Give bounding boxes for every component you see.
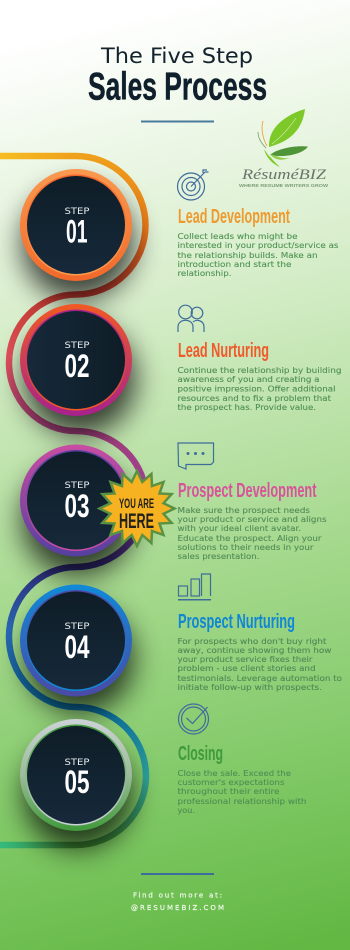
title bbox=[88, 44, 267, 108]
step 04 badge bbox=[20, 584, 132, 696]
heading: lead nurturing: Lead Nurturing bbox=[178, 339, 269, 362]
body text: closing: throughout their entire bbox=[178, 786, 280, 796]
body text: closing: professional relationship with bbox=[178, 796, 306, 806]
body text: lead development: interested in your product/service as bbox=[178, 240, 338, 250]
body text: lead nurturing: the prospect has. Provide value. bbox=[178, 402, 316, 412]
step 01 badge: STEP bbox=[64, 207, 90, 217]
body text: prospect nurturing bbox=[178, 636, 342, 692]
body text: lead development bbox=[178, 231, 338, 278]
you are here starburst: HERE bbox=[119, 510, 154, 533]
body text: lead development: Collect leads who might be bbox=[178, 231, 298, 241]
step 01 badge: 01 bbox=[66, 214, 88, 250]
footer call to action: @RESUMEBIZ.COM bbox=[131, 904, 224, 912]
body text: lead development: relationship. bbox=[178, 268, 232, 278]
body text: prospect development: sales presentation. bbox=[178, 551, 260, 561]
step 03 badge bbox=[20, 444, 132, 556]
step 04 badge: STEP bbox=[64, 622, 90, 632]
body text: prospect nurturing: away, continue showing them how bbox=[178, 645, 332, 655]
step 02 badge bbox=[20, 304, 132, 416]
body text: closing bbox=[178, 768, 306, 815]
step 04 badge: 04 bbox=[64, 629, 90, 665]
icon: target bbox=[178, 170, 208, 200]
body text: lead development: introduction and start the bbox=[178, 259, 292, 269]
body text: lead nurturing bbox=[178, 365, 342, 412]
footer call to action: Find out more at: bbox=[133, 892, 222, 900]
title: Sales Process bbox=[88, 66, 267, 108]
logo: ResumeBIZ: RésuméBIZ bbox=[241, 167, 327, 183]
body text: lead development: the relationship builds. Make an bbox=[178, 250, 318, 260]
section: lead nurturing bbox=[178, 305, 342, 412]
body text: lead nurturing: positive impression. Offer additional bbox=[178, 384, 336, 394]
step 05 badge: STEP bbox=[64, 758, 90, 768]
body text: prospect nurturing: testimonials. Leverage automation to bbox=[178, 673, 342, 683]
logo: ResumeBIZ bbox=[239, 109, 329, 189]
body text: prospect nurturing: For prospects who don't buy right bbox=[178, 636, 327, 646]
circle drop shadows bbox=[22, 188, 136, 849]
section: prospect development bbox=[178, 443, 326, 561]
icon: check mark circle bbox=[178, 704, 208, 734]
title: The Five Step bbox=[100, 44, 253, 69]
section: lead development bbox=[178, 170, 338, 278]
icon: chat bubble bbox=[178, 443, 214, 469]
heading: closing: Closing bbox=[178, 742, 223, 765]
body text: lead nurturing: awareness of you and creating a bbox=[178, 374, 320, 384]
step 03 badge: 03 bbox=[64, 488, 90, 524]
body text: prospect nurturing: your product service fixes their bbox=[178, 654, 313, 664]
step 02 badge: STEP bbox=[64, 341, 90, 351]
body text: prospect development: with your ideal client avatar. bbox=[178, 523, 301, 533]
body text: lead nurturing: Continue the relationship by building bbox=[178, 365, 342, 375]
body text: prospect development: Educate the prospect. Align your bbox=[178, 533, 322, 543]
step 03 badge: STEP bbox=[64, 481, 90, 491]
section: closing bbox=[178, 704, 306, 815]
icon: bar chart bbox=[178, 574, 211, 600]
body text: prospect development: solutions to their needs in your bbox=[178, 542, 314, 552]
icon: people bbox=[178, 305, 204, 332]
winding connector path bbox=[0, 156, 146, 845]
you are here starburst bbox=[100, 471, 174, 546]
step 05 badge: 05 bbox=[64, 764, 90, 800]
section: prospect nurturing bbox=[178, 574, 342, 692]
step 02 badge: 02 bbox=[64, 348, 90, 384]
body text: closing: customer's expectations bbox=[178, 777, 284, 787]
body text: lead nurturing: resources and to fix a problem that bbox=[178, 393, 332, 403]
body text: closing: Close the sale. Exceed the bbox=[178, 768, 291, 778]
body text: prospect nurturing: initiate follow-up with prospects. bbox=[178, 682, 322, 692]
step 01 badge bbox=[20, 169, 132, 281]
footer call to action bbox=[131, 892, 224, 912]
body text: prospect nurturing: problem - use client stories and bbox=[178, 663, 316, 673]
body text: prospect development: your product or service and aligns bbox=[178, 514, 326, 524]
body text: closing: you. bbox=[178, 805, 195, 815]
logo: ResumeBIZ: WHERE RESUME WRITERS GROW bbox=[239, 183, 329, 189]
you are here starburst: YOU ARE bbox=[119, 496, 154, 511]
body text: prospect development bbox=[178, 505, 326, 561]
body text: prospect development: Make sure the prospect needs bbox=[178, 505, 310, 515]
step 05 badge bbox=[20, 719, 132, 831]
